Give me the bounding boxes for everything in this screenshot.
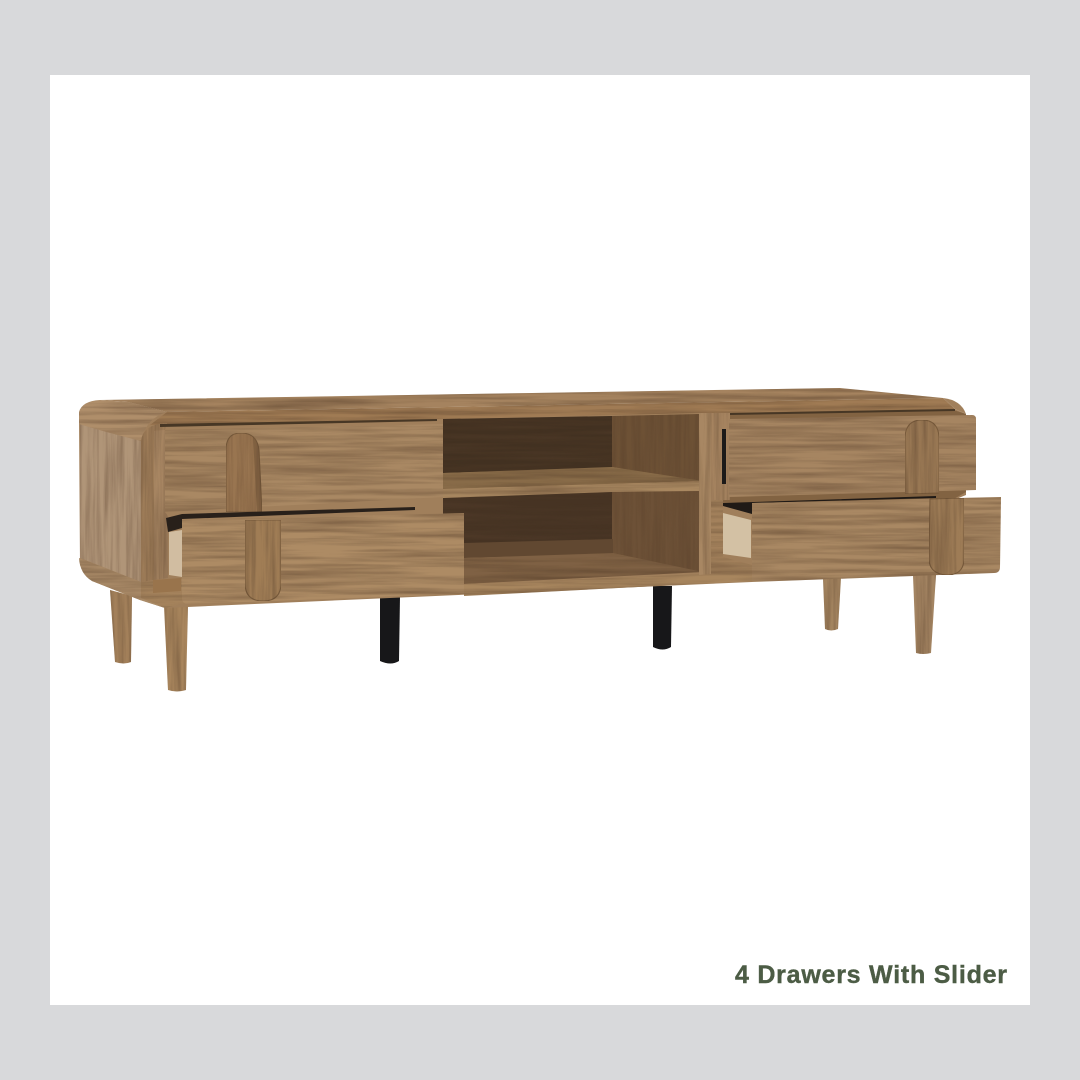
right frame (711, 409, 966, 503)
bottom front strip (141, 578, 184, 608)
drawer front (729, 415, 976, 497)
handle (226, 433, 262, 512)
front-left leg (164, 606, 188, 692)
lower right inner side (612, 491, 699, 572)
top-left drawer (165, 424, 443, 512)
handle (245, 520, 281, 601)
middle compartment (443, 413, 754, 596)
handle shadow (253, 437, 262, 512)
top-right drawer (729, 415, 976, 497)
lower front strip (464, 572, 754, 596)
furniture: TV console (79, 388, 1001, 692)
lower floor (464, 553, 703, 584)
top front band (150, 398, 955, 425)
lower-right drawer inner side (723, 513, 751, 558)
shelf top (443, 467, 703, 489)
lower back panel (443, 492, 612, 558)
upper back panel (443, 416, 612, 473)
lower-left shadow gap (166, 507, 415, 532)
white panel (50, 75, 1030, 1005)
left front pillar (141, 423, 167, 582)
shelf front edge (443, 481, 703, 498)
right band shadow line (730, 409, 955, 415)
back-left leg (110, 590, 132, 664)
back-right leg (823, 578, 841, 630)
top surface (100, 388, 943, 412)
handle (929, 498, 964, 575)
drawer front (752, 497, 1001, 582)
black metal leg right (653, 586, 672, 650)
drawer front (165, 424, 443, 512)
drawer front (182, 513, 464, 604)
upper right inner side (612, 414, 699, 482)
caption: 4 Drawers With Slider (735, 961, 1007, 989)
carcass backing (79, 402, 966, 608)
black metal leg left (380, 596, 400, 664)
top-band shadow line (160, 419, 437, 427)
lower-right drawer (752, 497, 1001, 582)
left rounded top cap (79, 400, 167, 441)
rail (464, 539, 613, 558)
front-right leg (913, 575, 936, 654)
drawer slot (722, 429, 726, 484)
lower-right shadow gap (723, 496, 936, 514)
handle (905, 420, 939, 494)
lower-left drawer (182, 513, 464, 604)
left rounded bottom cap (79, 558, 165, 608)
right rounded corner (943, 398, 966, 414)
left side panel (80, 420, 141, 582)
lower-left drawer inner side (169, 530, 182, 577)
centre divider (699, 413, 711, 575)
